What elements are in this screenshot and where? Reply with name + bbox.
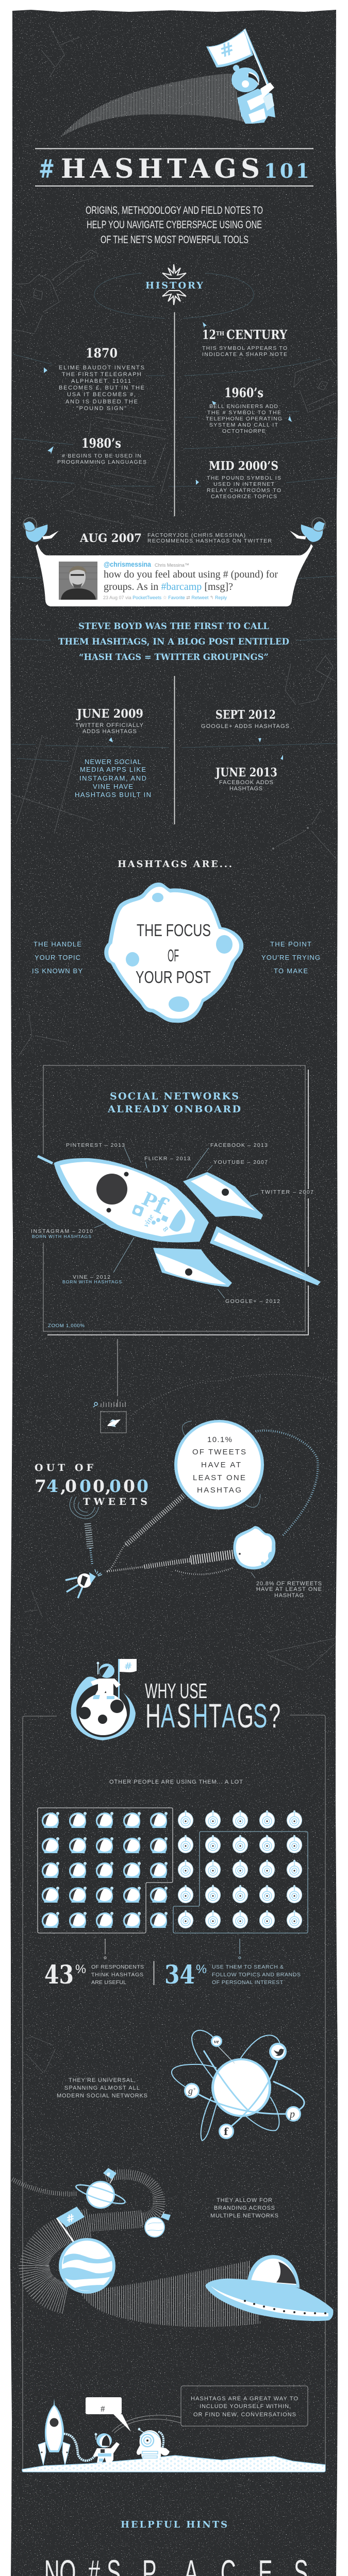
stat: 43 percent: %: [75, 1962, 86, 1976]
heading: helpful hints: HELPFUL HINTS: [121, 2519, 227, 2530]
stat: 34 percent: OF PERSONAL INTEREST: [212, 1979, 284, 1986]
icon: alien on ground: [137, 2428, 170, 2460]
label: handle: IS KNOWN BY: [32, 967, 82, 975]
timeline entry: june 2013: JUNE 2013: [214, 766, 277, 779]
timeline entry: mid 2000s: RELAY CHATROOMS TO: [207, 487, 281, 494]
planet: 10.1 percent: HAVE AT: [201, 1461, 241, 1469]
tweet: Chris Messina™: [155, 563, 189, 568]
icon: rocket: [38, 1156, 321, 1287]
callout: steve boyd: “HASH TAGS = TWITTER GROUPINGS”: [79, 652, 269, 663]
stat: 74,000,000 tweets: [35, 1462, 148, 1507]
stat: 74,000,000 tweets: ,: [105, 1476, 111, 1496]
stat: 74,000,000 tweets: 4: [46, 1476, 58, 1496]
large striped planet: #: [64, 2211, 76, 2225]
timeline axis: [174, 312, 175, 824]
moon: 20.8 percent: [233, 1526, 275, 1569]
stat: 74,000,000 tweets: TWEETS: [83, 1496, 147, 1507]
timeline entry: mid 2000s: CATEGORIZE TOPICS: [211, 494, 277, 500]
label: point: YOU'RE TRYING: [261, 954, 320, 961]
bird left: [23, 518, 59, 542]
tweet: groups. As in #barcamp [msg]?: [104, 581, 233, 592]
timeline entry: 1960s: OCTOTHORPE: [222, 428, 266, 434]
text: branding: BRANDING ACROSS: [214, 2205, 275, 2211]
stat: 34 percent: USE THEM TO SEARCH &: [212, 1964, 284, 1970]
ufo trail: [77, 2261, 260, 2327]
logos on rocket: 8: [161, 1225, 170, 1233]
label: handle: YOUR TOPIC: [35, 954, 80, 961]
rocket labels: FLICKR – 2013: [144, 1156, 190, 1162]
text: branding: MULTIPLE NETWORKS: [210, 2213, 278, 2219]
large striped planet: [57, 2207, 115, 2294]
rocket labels: TWITTER – 2007: [261, 1189, 313, 1195]
stat: 74,000,000 tweets: 0: [79, 1476, 91, 1496]
icon: astronaut with hashtag flag and trail: [60, 28, 275, 138]
icon: atom of social networks: p: [289, 2109, 295, 2120]
timeline entry: 1960s: SYSTEM AND CALL IT: [209, 422, 278, 428]
logos on rocket: P: [139, 1188, 160, 1213]
panel: why use frame: [23, 1715, 325, 2471]
timeline entry: sept 2012: GOOGLE+ ADDS HASHTAGS: [201, 723, 289, 730]
icon: astronaut with hashtag flag and trail: #: [217, 38, 237, 62]
title: #HASHTAGS 101: 101: [264, 159, 309, 182]
hint: no spaces: [44, 2553, 308, 2576]
stat: 74,000,000 tweets: 0: [65, 1476, 77, 1496]
zoom slider and thumbnail: [93, 1339, 126, 1433]
callout: steve boyd: [58, 621, 289, 663]
timeline entry: 1960s: [206, 385, 292, 434]
rocket labels: YOUTUBE – 2007: [213, 1159, 268, 1165]
timeline entry: mid 2000s: MID 2000’S: [209, 459, 278, 473]
heading: why use hashtags: H: [145, 1697, 161, 1735]
satellite beams: [70, 1431, 318, 1574]
timeline entry: 1960s: 1960’s: [224, 385, 263, 400]
icon: astronaut on moon: #: [124, 1661, 132, 1672]
timeline entry: 1870: [44, 346, 144, 412]
rocket labels: [31, 1142, 313, 1329]
stat: 34 percent: FOLLOW TOPICS AND BRANDS: [212, 1972, 301, 1978]
icon: atom of social networks: +: [193, 2087, 196, 2092]
icon: rocket on ground: [38, 2398, 96, 2465]
timeline entry: 1980s: # BEGINS TO BE USED IN: [62, 453, 141, 459]
icon: atom of social networks: g: [188, 2086, 193, 2096]
planets with flags: [57, 2168, 171, 2294]
timeline entry: 1980s: 1980’s: [81, 436, 121, 451]
panel: social networks frame: [43, 1065, 308, 1335]
heading: social networks: [107, 1091, 241, 1115]
stat: 74,000,000 tweets: 0: [93, 1476, 105, 1496]
timeline entry: mid 2000s: USED IN INTERNET: [213, 481, 275, 487]
tweet banner: [36, 544, 313, 606]
rocket labels: FACEBOOK – 2013: [210, 1142, 268, 1148]
timeline entry: sept 2012: [201, 708, 289, 742]
spiral trail: [12, 2175, 159, 2299]
icon: atom of social networks: f: [224, 2126, 229, 2138]
label: handle: [32, 940, 82, 975]
callout: conversations: HASHTAGS ARE A GREAT WAY TO: [191, 2396, 298, 2402]
timeline entry: 1870: ELIME BAUDOT INVENTS: [59, 365, 144, 371]
heading: why use hashtags: ?: [269, 1697, 280, 1735]
speech bubble: hash: #: [101, 2404, 105, 2414]
heading: why use hashtags: H: [193, 1697, 208, 1735]
note: newer social media apps: INSTAGRAM, AND: [79, 774, 146, 782]
note: newer social media apps: [75, 758, 151, 799]
heading: why use hashtags: S: [177, 1697, 191, 1735]
timeline entry: 1960s: TELEPHONE OPERATING: [206, 416, 282, 422]
planet: focus of your post: [104, 883, 243, 1023]
stat: 43 percent: ARE USEFUL: [91, 1979, 126, 1986]
chart: pictogram of 50 heads: [38, 1808, 308, 1933]
text: other people: OTHER PEOPLE ARE USING THEM... A LOT: [109, 1779, 243, 1785]
timeline entry: 12th century: CENTURY: [226, 327, 288, 342]
text: branding: THEY ALLOW FOR: [217, 2197, 272, 2204]
date: aug 2007: [79, 532, 272, 545]
timeline entry: 12th century: THIS SYMBOL APPEARS TO: [202, 345, 287, 351]
planet: 10.1 percent: 10.1%: [207, 1435, 232, 1444]
label: handle: THE HANDLE: [34, 940, 81, 948]
callout: conversations: INCLUDE YOURSELF WITHIN,: [200, 2403, 291, 2410]
timeline entry: june 2009: [75, 707, 144, 742]
speech bubble: hash: [86, 2397, 131, 2432]
timeline entry: 1870: BECOMES £, BUT IN THE: [59, 385, 144, 391]
note: 20.8 percent retweets: [251, 1572, 322, 1599]
timeline entry: 12th century: 12: [202, 327, 216, 342]
ringed planet: #: [106, 2172, 110, 2178]
timeline entry: 1870: USA IT BECOMES #,: [67, 392, 136, 398]
timeline entry: mid 2000s: THE POUND SYMBOL IS: [207, 475, 281, 481]
label: point: [261, 940, 320, 975]
rocket labels: ZOOM 1,000%: [48, 1323, 85, 1329]
stat: 34 percent: %: [196, 1962, 207, 1976]
dotted orbit path: [131, 1375, 336, 1416]
timeline entry: sept 2012: SEPT 2012: [216, 708, 276, 722]
lunar ground: [22, 2455, 325, 2472]
heading: social networks: ALREADY ONBOARD: [107, 1104, 241, 1115]
note: 20.8 percent retweets: HAVE AT LEAST ONE: [256, 1586, 322, 1592]
stat: 34 percent: [164, 1939, 301, 1990]
title: #HASHTAGS 101: HASHTAGS: [61, 154, 260, 184]
timeline entry: june 2009: JUNE 2009: [76, 707, 143, 721]
timeline entry: 1980s: [47, 436, 146, 465]
planet: focus of your post: YOUR POST: [136, 968, 211, 987]
icon: astronaut on ground: [93, 2433, 120, 2463]
timeline entry: 12th century: INDIDCATE A SHARP NOTE: [202, 351, 287, 358]
date: aug 2007: AUG 2007: [79, 532, 142, 545]
timeline entry: mid 2000s: [196, 459, 281, 500]
heading: why use hashtags: T: [209, 1697, 222, 1735]
satellite icon: [65, 1569, 102, 1598]
logos on rocket: vine: [142, 1213, 156, 1229]
planet: 10.1 percent: LEAST ONE: [193, 1473, 245, 1482]
timeline entry: 1960s: THE # SYMBOL TO THE: [207, 410, 281, 416]
note: newer social media apps: HASHTAGS BUILT IN: [75, 791, 151, 799]
logos on rocket: f: [151, 1192, 172, 1221]
heading: social networks: SOCIAL NETWORKS: [110, 1091, 239, 1102]
text: branding: [210, 2197, 278, 2219]
planet: 10.1 percent: OF TWEETS: [192, 1448, 246, 1456]
icon: twitter birds with tweet banner: [23, 518, 325, 606]
tweet: how do you feel about using # (pound) for: [104, 569, 278, 580]
heading: history: HISTORY: [145, 280, 204, 291]
text: universal: THEY’RE UNIVERSAL,: [69, 2077, 136, 2083]
rocket labels: GOOGLE+ – 2012: [225, 1298, 280, 1304]
stat: 43 percent: [44, 1939, 144, 1990]
callout: conversations: OR FIND NEW, CONVERSATIONS: [193, 2412, 296, 2418]
heading: hashtags are: HASHTAGS ARE...: [118, 859, 232, 870]
stat: 34 percent: 34: [164, 1959, 195, 1990]
rocket labels: VINE – 2012: [73, 1274, 110, 1280]
stat: 74,000,000 tweets: 0: [123, 1476, 135, 1496]
timeline entry: 1870: ALPHABET. 11011: [71, 378, 131, 384]
date: aug 2007: RECOMMENDS HASHTAGS ON TWITTER: [147, 538, 272, 544]
small planet: [144, 2211, 171, 2238]
note: 20.8 percent retweets: 20.8% OF RETWEETS: [256, 1581, 322, 1587]
text: universal: SPANNING ALMOST ALL: [64, 2085, 140, 2091]
timeline entry: june 2013: FACEBOOK ADDS: [219, 779, 273, 786]
stat: 74,000,000 tweets: 0: [137, 1476, 148, 1496]
timeline entry: june 2013: HASHTAGS: [229, 786, 262, 792]
timeline entry: 1870: 1870: [86, 346, 118, 361]
icon: ufo: [205, 2255, 333, 2321]
label: point: THE POINT: [270, 940, 311, 948]
icon: astronaut on moon: [71, 1659, 137, 1740]
note: newer social media apps: MEDIA APPS LIKE: [80, 766, 146, 773]
stat: 74,000,000 tweets: OUT OF: [35, 1462, 94, 1473]
rocket labels: BORN WITH HASHTAGS: [62, 1279, 122, 1284]
logos on rocket: [131, 1188, 186, 1233]
tweet: [59, 561, 278, 601]
label: point: TO MAKE: [274, 967, 308, 975]
heading: why use hashtags: [145, 1679, 280, 1735]
subtitle: HELP YOU NAVIGATE CYBERSPACE USING ONE: [87, 219, 262, 231]
tweet photo: [59, 562, 97, 600]
timeline entry: 1870: THE FIRST TELEGRAPH: [62, 371, 141, 378]
callout: steve boyd: STEVE BOYD WAS THE FIRST TO CALL: [78, 621, 269, 632]
stat: 43 percent: THINK HASHTAGS: [91, 1972, 143, 1978]
planet: focus of your post: THE FOCUS: [137, 921, 211, 940]
title rule top: [35, 148, 313, 149]
divider: [154, 1961, 155, 1985]
rocket labels: BORN WITH HASHTAGS: [32, 1234, 91, 1239]
bird right: [290, 518, 325, 542]
subtitle: [86, 205, 263, 246]
timeline entry: june 2009: ADDS HASHTAGS: [82, 728, 137, 735]
heading: why use hashtags: A: [222, 1697, 236, 1735]
tweet: @chrismessina: [104, 561, 151, 568]
tweet: 23 Aug 07 via PocketTweets ☆ Favorite ⇄ Retweet ↰ Reply: [103, 595, 227, 601]
timeline entry: 1870: AND IS DUBBED THE: [65, 399, 138, 405]
planet: 10.1 percent: HASHTAG: [197, 1486, 241, 1495]
callout: conversations: [112, 2386, 308, 2433]
heading: why use hashtags: A: [161, 1697, 175, 1735]
icon: atom of social networks: [172, 2030, 304, 2141]
subtitle: OF THE NET’S MOST POWERFUL TOOLS: [101, 234, 248, 246]
astronaut heads: 43 percent: [42, 1812, 168, 1928]
callout: steve boyd: THEM HASHTAGS, IN A BLOG POST ENTITLED: [58, 637, 289, 647]
stat: 43 percent: 43: [44, 1959, 74, 1990]
planet: 10.1 percent: [174, 1420, 264, 1510]
heading: why use hashtags: S: [253, 1697, 267, 1735]
ringed planet: [74, 2168, 127, 2209]
rocket labels: INSTAGRAM – 2010: [31, 1228, 93, 1234]
timeline entry: 12th century: [202, 322, 288, 358]
title rule bottom: [35, 185, 313, 187]
timeline entry: 1870: "POUND SIGN": [76, 405, 126, 412]
note: newer social media apps: NEWER SOCIAL: [85, 758, 141, 766]
timeline entry: 12th century: TH: [216, 330, 224, 337]
icon: atom of social networks: ve: [214, 2039, 219, 2045]
subtitle: ORIGINS, METHODOLOGY AND FIELD NOTES TO: [86, 205, 263, 216]
note: 20.8 percent retweets: HASHTAG: [274, 1592, 304, 1599]
heading: history: [94, 264, 254, 318]
timeline entry: june 2013: [214, 755, 283, 792]
text: universal: MODERN SOCIAL NETWORKS: [57, 2093, 147, 2099]
alien heads: 34 percent: [178, 1810, 302, 1928]
heading: why use hashtags: G: [237, 1697, 254, 1735]
text: universal: [57, 2077, 147, 2099]
date: aug 2007: FACTORYJOE (CHRIS MESSINA): [147, 532, 245, 538]
note: newer social media apps: VINE HAVE: [93, 783, 133, 790]
stat: 74,000,000 tweets: 7: [35, 1476, 46, 1496]
timeline entry: june 2009: TWITTER OFFICIALLY: [75, 722, 144, 728]
stat: 74,000,000 tweets: 0: [109, 1476, 121, 1496]
stat: 43 percent: OF RESPONDENTS: [91, 1964, 144, 1970]
rocket labels: PINTEREST – 2013: [66, 1142, 125, 1148]
timeline entry: 1960s: BELL ENGINEERS ADD: [209, 403, 278, 410]
title: #HASHTAGS 101: #: [39, 154, 55, 184]
stat: 74,000,000 tweets: ,: [60, 1476, 66, 1496]
timeline entry: 1980s: PROGRAMMING LANGUAGES: [57, 459, 146, 465]
planet: focus of your post: OF: [168, 946, 179, 965]
heading: why use hashtags: WHY USE: [145, 1679, 207, 1703]
